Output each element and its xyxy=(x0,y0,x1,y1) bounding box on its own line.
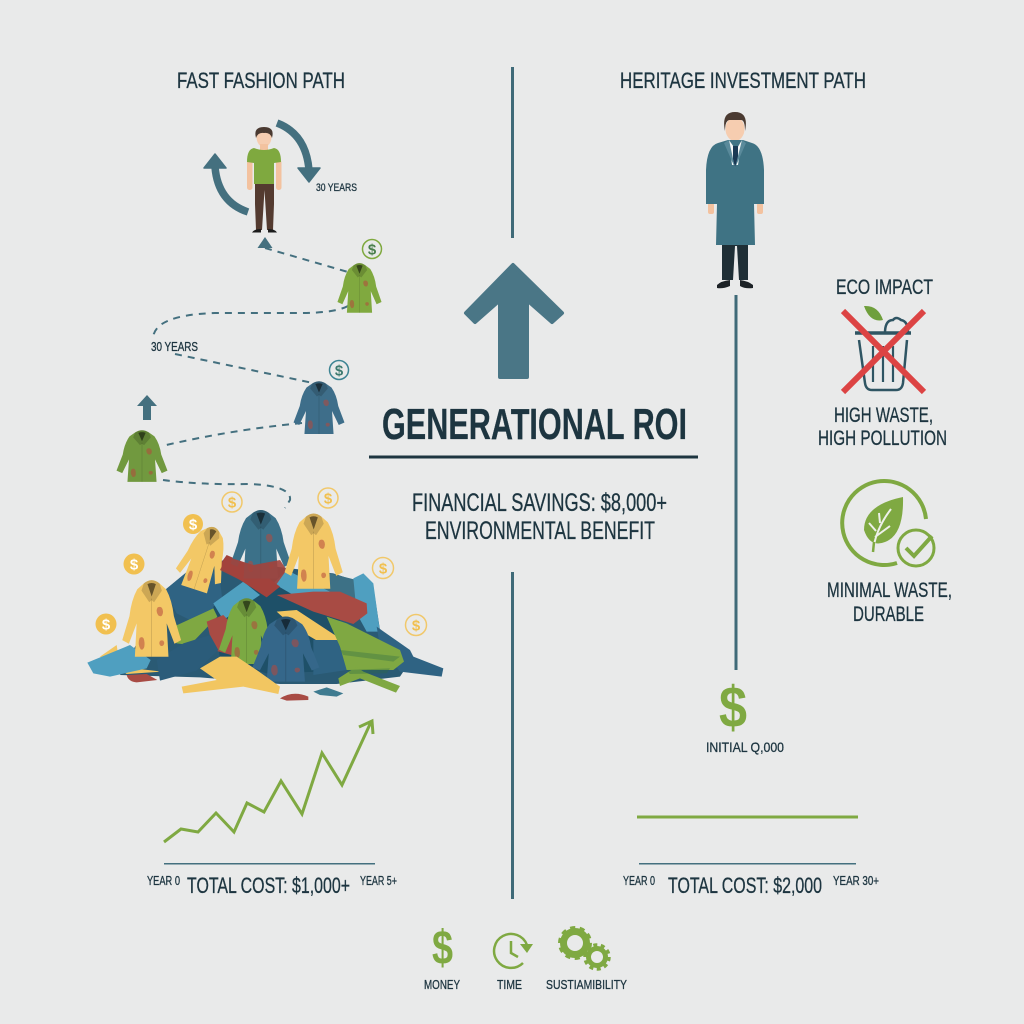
clothing pile xyxy=(87,510,443,701)
icon: leaf with check xyxy=(842,481,934,566)
heading: heritage investment path: HERITAGE INVESTMENT PATH xyxy=(620,68,866,93)
icon: cycle arrow right xyxy=(277,123,320,182)
legend: money: $ xyxy=(432,922,453,975)
icon: cycle arrow left xyxy=(204,154,248,212)
heading: eco impact: ECO IMPACT xyxy=(836,276,933,299)
person: green t-shirt xyxy=(247,127,282,232)
chart axis xyxy=(639,863,856,864)
legend: money: MONEY xyxy=(424,977,460,992)
text: environmental benefit: ENVIRONMENTAL BENEFIT xyxy=(425,517,655,545)
icons: pile dollar coins: $ xyxy=(130,556,139,574)
icons: pile dollar coins: $ xyxy=(412,618,421,634)
icons: pile dollar coins: $ xyxy=(379,560,388,578)
legend: money xyxy=(424,922,460,992)
chart line xyxy=(164,721,373,842)
axis label: year 0: YEAR 0 xyxy=(147,874,180,888)
green timeline xyxy=(734,295,738,670)
icon: dollar green: $ xyxy=(368,242,377,258)
coat: green with dollar xyxy=(337,240,382,313)
chart axis xyxy=(164,863,375,864)
coat: blue with dollar xyxy=(294,360,348,434)
icons: pile dollar coins: $ xyxy=(228,494,237,512)
central divider upper xyxy=(511,67,514,238)
figure: casual person with cycle arrows xyxy=(204,123,320,232)
label: initial cost: INITIAL Q,000 xyxy=(706,739,784,755)
axis label: year 30+: YEAR 30+ xyxy=(833,874,879,888)
text: minimal waste, durable xyxy=(827,579,952,626)
label: 30 years (upper): 30 YEARS xyxy=(316,182,357,194)
chart: fast fashion rising cost xyxy=(147,721,397,898)
axis label: year 5+: YEAR 5+ xyxy=(360,874,397,888)
heading: fast fashion path: FAST FASHION PATH xyxy=(177,68,345,93)
total cost: $1,000+: TOTAL COST: $1,000+ xyxy=(187,873,350,898)
icon: small triangle arrow xyxy=(258,237,272,248)
legend: sustainability xyxy=(546,928,627,992)
title: generational ROI: GENERATIONAL ROI xyxy=(382,400,687,449)
central divider lower xyxy=(511,572,514,899)
legend: time xyxy=(494,934,533,992)
flat green line xyxy=(637,816,858,818)
icon: small up arrow xyxy=(137,395,157,420)
icon: crossed out trash can xyxy=(843,306,924,392)
label: 30 years (middle): 30 YEARS xyxy=(151,340,198,354)
axis label: year 0: YEAR 0 xyxy=(623,874,655,888)
icon: large dollar sign: $ xyxy=(719,675,747,740)
icon: dollar teal: $ xyxy=(335,362,344,380)
text: minimal waste, durable: MINIMAL WASTE, xyxy=(827,579,952,602)
legend: sustainability: SUSTIAMIBILITY xyxy=(546,977,627,992)
text: financial savings: FINANCIAL SAVINGS: $8,000+ xyxy=(412,489,667,517)
icons: pile dollar coins: $ xyxy=(102,616,111,634)
icons: pile dollar coins: $ xyxy=(324,490,333,508)
text: high waste, high pollution: HIGH WASTE, xyxy=(834,404,933,427)
chart: heritage flat cost xyxy=(623,816,879,898)
title rule xyxy=(369,456,698,458)
icon: central up arrow xyxy=(466,265,562,377)
text: high waste, high pollution: HIGH POLLUTION xyxy=(818,427,947,450)
icons: pile dollar coins: $ xyxy=(189,516,198,534)
icons: pile dollar coins xyxy=(96,488,426,636)
figure: heritage person in long coat xyxy=(706,112,764,288)
text: minimal waste, durable: DURABLE xyxy=(853,603,924,626)
total cost: $2,000: TOTAL COST: $2,000 xyxy=(668,873,822,898)
legend: time: TIME xyxy=(497,977,522,992)
text: high waste, high pollution xyxy=(818,404,947,450)
dashed journey path xyxy=(153,248,348,508)
coat: green stained xyxy=(117,430,167,482)
